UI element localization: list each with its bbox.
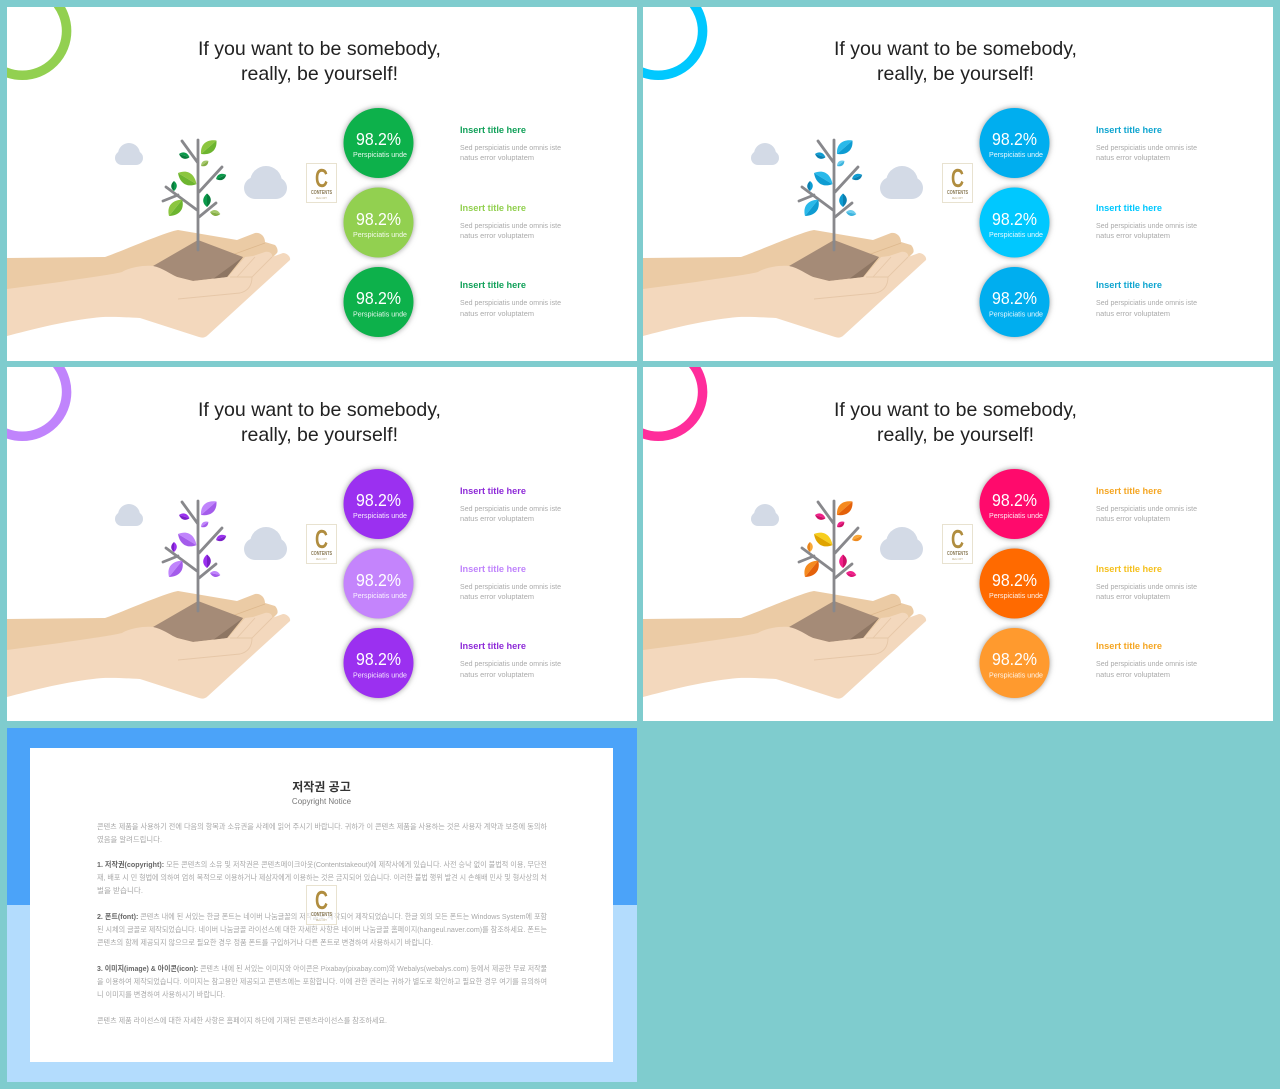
text block 2: Insert title here <box>1096 203 1162 214</box>
watermark logo: C <box>315 524 328 554</box>
text block 1 <box>1096 125 1197 162</box>
watermark logo: CONTENTS <box>947 190 969 196</box>
circle stat 3 <box>344 628 414 698</box>
watermark logo: C <box>315 163 328 193</box>
circle stat 3 <box>344 267 414 337</box>
text block 1: natus error voluptatem <box>1096 516 1170 523</box>
watermark logo: C <box>951 163 964 193</box>
notice section 3: 3. 이미지(image) & 아이콘(icon): 콘텐츠 내에 된 서있는 이미지와 아이콘은 Pixabay(pixabay.com)와 Webalys(webalys.com) 등에서 제공한 무료 저작물 <box>97 963 547 973</box>
circle stat 3: 98.2% <box>356 649 401 669</box>
circle stat 2: 98.2% <box>992 209 1037 229</box>
text block 2: Insert title here <box>460 564 526 575</box>
watermark logo: CONTENTS <box>311 190 333 196</box>
title: If you want to be somebody, <box>834 38 1077 60</box>
title <box>198 38 441 85</box>
panel: copyright notice <box>7 728 637 1082</box>
text block 3: Sed perspiciatis unde omnis iste <box>460 661 561 668</box>
illustration: hands holding soil <box>7 230 290 338</box>
icon: large cloud <box>880 166 923 199</box>
title: really, be yourself! <box>877 63 1034 85</box>
circle stat 3: Perspiciatis unde <box>353 672 407 680</box>
circle stat 1: 98.2% <box>356 129 401 149</box>
notice intro <box>97 821 547 844</box>
text block 3: natus error voluptatem <box>1096 672 1170 679</box>
text block 1 <box>460 125 561 162</box>
text block 2: Sed perspiciatis unde omnis iste <box>460 584 561 591</box>
notice section 2: 2. 폰트(font): 콘텐츠 내에 된 서있는 한글 폰트는 네이버 나눔글꼴의 저작물로 제작되어 제작되었습니다. 한글 외의 모든 폰트는 Windows System에 포함 <box>97 911 547 921</box>
watermark logo: REAL COPY <box>316 196 327 200</box>
watermark logo: CONTENTS <box>311 551 333 557</box>
notice heading: 저작권 공고 <box>292 779 351 794</box>
notice section 2 <box>97 911 547 947</box>
watermark logo <box>942 163 972 202</box>
text block 2: Sed perspiciatis unde omnis iste <box>460 223 561 230</box>
notice section 3: 을 이용하여 제작되었습니다. 이미지는 참고용만 제공되고 콘텐츠에는 포함합니다. 이에 관한 권리는 귀하가 별도로 확인하고 필요한 경우 여기를 유의하여 <box>97 976 547 986</box>
watermark logo: REAL COPY <box>952 196 963 200</box>
decorative ring <box>614 348 703 436</box>
notice section 3 <box>97 963 547 999</box>
text block 3 <box>1096 641 1197 679</box>
text block 1: Sed perspiciatis unde omnis iste <box>1096 145 1197 152</box>
white notice sheet <box>30 748 613 1062</box>
illustration: leaves <box>800 136 863 220</box>
icon: small cloud <box>115 504 143 526</box>
panel: green slide <box>7 7 637 361</box>
title: really, be yourself! <box>241 63 398 85</box>
notice section 1: 벌을 받습니다. <box>97 885 143 895</box>
text block 3: Insert title here <box>460 280 526 291</box>
title: If you want to be somebody, <box>198 38 441 60</box>
notice heading <box>292 779 352 806</box>
text block 1: Sed perspiciatis unde omnis iste <box>460 506 561 513</box>
circle stat 3 <box>980 267 1050 337</box>
text block 1: Sed perspiciatis unde omnis iste <box>1096 506 1197 513</box>
text block 1: Insert title here <box>1096 486 1162 497</box>
circle stat 1: Perspiciatis unde <box>353 152 407 159</box>
text block 2: Insert title here <box>460 203 526 214</box>
circle stat 2: 98.2% <box>992 570 1037 590</box>
text block 3: natus error voluptatem <box>460 311 534 318</box>
text block 2: Insert title here <box>1096 564 1162 575</box>
illustration: hands holding soil <box>643 591 926 699</box>
watermark logo <box>306 885 336 924</box>
decorative ring <box>614 0 703 75</box>
panel: purple slide <box>7 367 637 721</box>
text block 1: Insert title here <box>460 125 526 136</box>
circle stat 3: 98.2% <box>992 288 1037 308</box>
icon: large cloud <box>244 166 287 199</box>
illustration: leaves <box>164 497 227 581</box>
watermark logo: CONTENTS <box>311 912 333 918</box>
circle stat 1 <box>980 469 1050 539</box>
circle stat 1: Perspiciatis unde <box>353 513 407 520</box>
watermark logo <box>306 163 336 202</box>
title: If you want to be somebody, <box>834 399 1077 421</box>
notice section 3: 니 이미지를 변경하여 사용하시기 바랍니다. <box>97 989 225 999</box>
text block 2: natus error voluptatem <box>460 594 534 601</box>
text block 3 <box>1096 280 1197 318</box>
text block 3 <box>460 641 561 679</box>
illustration: leaves <box>800 497 863 581</box>
text block 2: natus error voluptatem <box>1096 233 1170 240</box>
circle stat 1: 98.2% <box>356 490 401 510</box>
illustration: hands holding soil <box>7 591 290 699</box>
decorative ring <box>0 348 67 436</box>
illustration: sapling trunk and branches <box>163 140 222 250</box>
circle stat 2 <box>344 548 414 618</box>
text block 2 <box>1096 564 1197 601</box>
circle stat 1: 98.2% <box>992 490 1037 510</box>
circle stat 3: Perspiciatis unde <box>989 312 1043 318</box>
illustration: leaves <box>164 136 227 220</box>
panel: pink and orange slide <box>643 367 1273 721</box>
text block 3: Insert title here <box>1096 641 1162 652</box>
text block 3: Sed perspiciatis unde omnis iste <box>1096 300 1197 307</box>
notice section 1 <box>97 859 547 895</box>
notice heading: Copyright Notice <box>292 797 352 806</box>
icon: small cloud <box>751 143 779 165</box>
text block 2 <box>460 564 561 601</box>
circle stat 2 <box>980 548 1050 618</box>
text block 2 <box>1096 203 1197 240</box>
text block 3: natus error voluptatem <box>460 672 534 679</box>
text block 2 <box>460 203 561 240</box>
circle stat 1 <box>980 108 1050 178</box>
illustration: sapling trunk and branches <box>799 501 858 611</box>
notice footer line: 콘텐츠 제품 라이선스에 대한 자세한 사항은 홈페이지 하단에 기재된 콘텐츠라이선스를 참조하세요. <box>97 1015 387 1025</box>
text block 3: Sed perspiciatis unde omnis iste <box>1096 661 1197 668</box>
circle stat 2 <box>344 188 414 258</box>
text block 3 <box>460 280 561 318</box>
title: really, be yourself! <box>241 424 398 446</box>
illustration: sapling trunk and branches <box>163 501 222 611</box>
text block 3: Sed perspiciatis unde omnis iste <box>460 300 561 307</box>
icon: small cloud <box>115 143 143 165</box>
text block 1 <box>1096 486 1197 523</box>
text block 2: natus error voluptatem <box>1096 594 1170 601</box>
watermark logo: C <box>951 524 964 554</box>
text block 1: natus error voluptatem <box>1096 155 1170 162</box>
watermark logo: REAL COPY <box>316 918 327 922</box>
notice intro: 콘텐츠 제품을 사용하기 전에 다음의 항목과 소유권을 사례에 읽어 주시기 바랍니다. 귀하가 이 콘텐츠 제품을 사용하는 것은 사용자 계약과 보증에 동의하 <box>97 821 547 831</box>
circle stat 2 <box>980 188 1050 258</box>
circle stat 3 <box>980 628 1050 698</box>
text block 1: natus error voluptatem <box>460 155 534 162</box>
circle stat 2: Perspiciatis unde <box>353 593 407 600</box>
title: really, be yourself! <box>877 424 1034 446</box>
watermark logo: REAL COPY <box>316 557 327 561</box>
watermark logo: CONTENTS <box>947 551 969 557</box>
text block 3: Insert title here <box>460 641 526 652</box>
watermark logo: C <box>315 885 328 915</box>
text block 1: Insert title here <box>460 486 526 497</box>
circle stat 1 <box>344 469 414 539</box>
text block 3: Insert title here <box>1096 280 1162 291</box>
text block 1: Sed perspiciatis unde omnis iste <box>460 145 561 152</box>
text block 2: Sed perspiciatis unde omnis iste <box>1096 223 1197 230</box>
circle stat 1: Perspiciatis unde <box>989 152 1043 159</box>
circle stat 2: Perspiciatis unde <box>353 232 407 239</box>
title <box>198 399 441 446</box>
circle stat 2: Perspiciatis unde <box>989 232 1043 239</box>
watermark logo <box>942 524 972 564</box>
panel: blue slide <box>643 7 1273 361</box>
text block 2: natus error voluptatem <box>460 233 534 240</box>
title <box>834 38 1077 85</box>
text block 3: natus error voluptatem <box>1096 311 1170 318</box>
illustration: hands holding soil <box>643 230 926 338</box>
circle stat 1: 98.2% <box>992 129 1037 149</box>
circle stat 2: 98.2% <box>356 209 401 229</box>
icon: large cloud <box>244 527 287 560</box>
watermark logo: REAL COPY <box>952 557 963 561</box>
circle stat 2: 98.2% <box>356 570 401 590</box>
title: If you want to be somebody, <box>198 399 441 421</box>
title <box>834 399 1077 446</box>
circle stat 1: Perspiciatis unde <box>989 513 1043 520</box>
circle stat 3: 98.2% <box>356 288 401 308</box>
notice section 1: 1. 저작권(copyright): 모든 콘텐츠의 소유 및 저작권은 콘텐츠메이크아웃(Contentstakeout)에 제작사에게 있습니다. 사전 승낙 없이 불법적 이용, 무단전 <box>97 859 547 869</box>
notice section 2: 된 시체의 글꼴로 제작되었습니다. 네이버 나눔글꼴 라이선스에 대한 자세한 사항은 네이버 나눔글꼴 홈페이지(hangeul.naver.com)를 참조하세요. 폰트는 <box>97 924 547 934</box>
circle stat 3: 98.2% <box>992 649 1037 669</box>
text block 1: natus error voluptatem <box>460 516 534 523</box>
text block 2: Sed perspiciatis unde omnis iste <box>1096 584 1197 591</box>
notice intro: 였음을 알려드립니다. <box>97 834 162 844</box>
notice section 2: 콘텐츠의 함께 제공되지 않으므로 필요한 경우 정품 폰트를 구입하거나 다른 폰트로 변경하여 사용하시기 바랍니다. <box>97 937 433 947</box>
icon: large cloud <box>880 527 923 560</box>
circle stat 1 <box>344 108 414 178</box>
circle stat 3: Perspiciatis unde <box>353 312 407 318</box>
blue header band <box>7 728 637 905</box>
text block 1 <box>460 486 561 523</box>
decorative ring <box>0 0 67 75</box>
icon: small cloud <box>751 504 779 526</box>
illustration: sapling trunk and branches <box>799 140 858 250</box>
circle stat 3: Perspiciatis unde <box>989 672 1043 680</box>
watermark logo <box>306 524 336 564</box>
notice section 1: 재, 배포 시 민 형법에 의하여 엄히 목적으로 이용하거나 제삼자에게 이용하는 것은 금지되어 있습니다. 이러한 불법 행위 발견 시 손해배 민사 및 형사상의 처 <box>97 872 547 882</box>
text block 1: Insert title here <box>1096 125 1162 136</box>
circle stat 2: Perspiciatis unde <box>989 593 1043 600</box>
